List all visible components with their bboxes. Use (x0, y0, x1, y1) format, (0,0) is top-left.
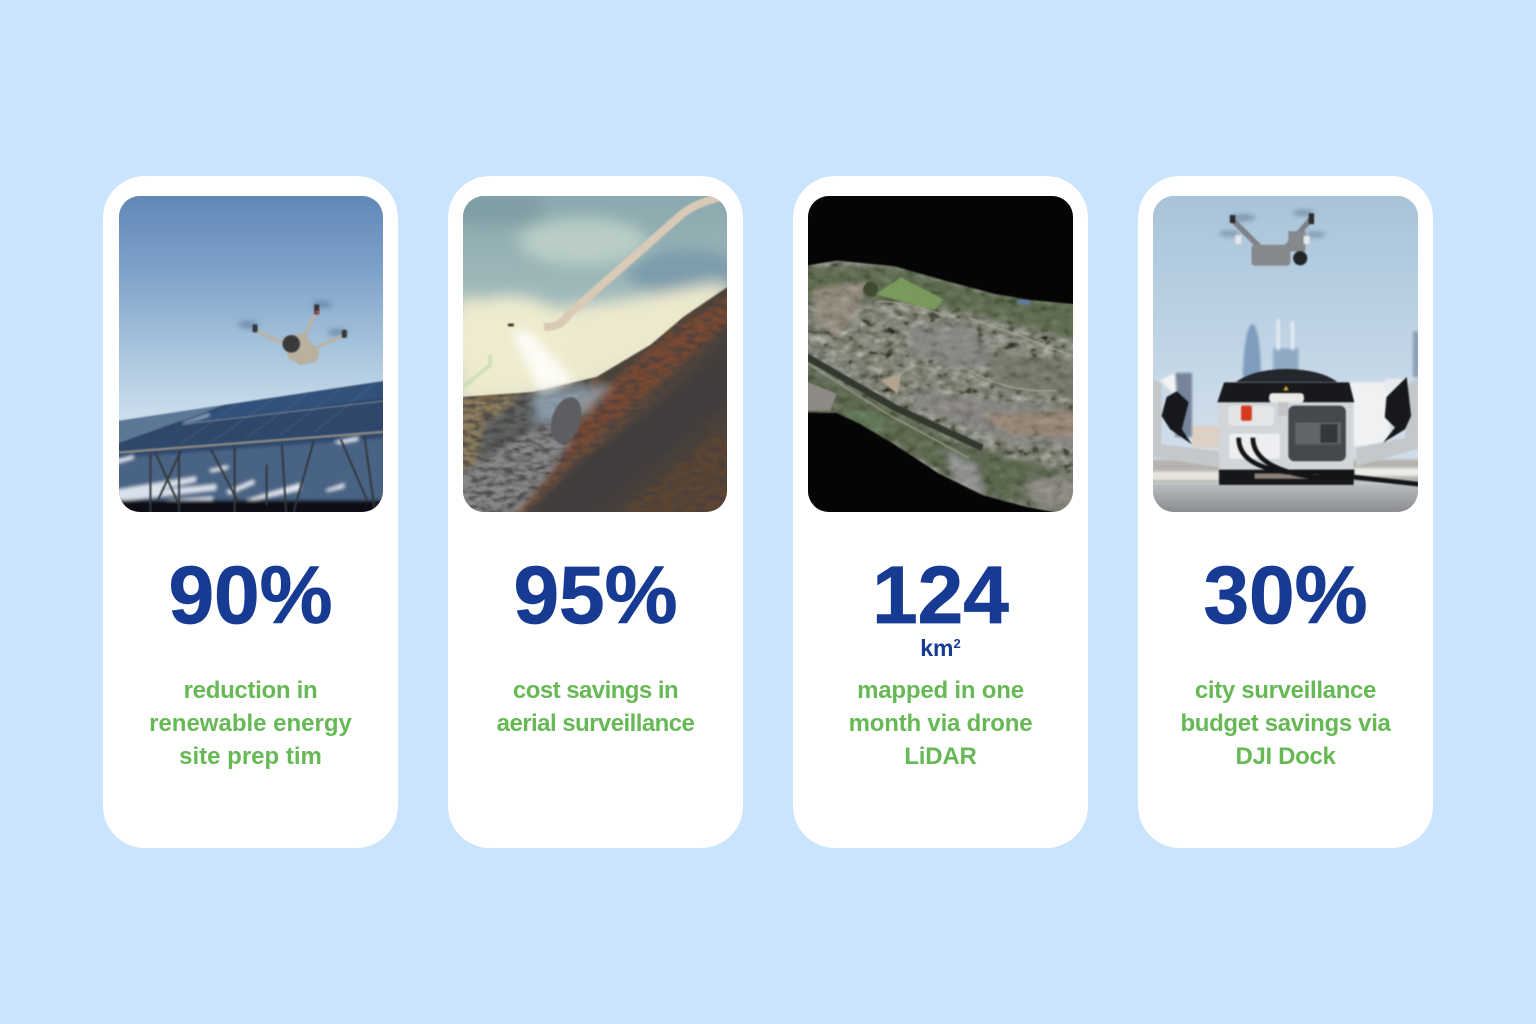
dock wings (1148, 377, 1219, 467)
stat: 95%: 95% (513, 550, 678, 641)
panel: city surveillance (1138, 176, 1433, 848)
description (497, 677, 694, 737)
description: mapped in one (857, 677, 1024, 704)
description: LiDAR (904, 743, 977, 770)
skyline (1148, 320, 1422, 483)
icon: drone (238, 302, 348, 365)
description: renewable energy (149, 710, 352, 737)
description: site prep tim (179, 743, 322, 770)
description (849, 677, 1032, 770)
image: drone over solar panels (119, 196, 383, 512)
description: cost savings in (513, 677, 678, 704)
description: aerial surveillance (497, 710, 694, 737)
description (149, 677, 352, 770)
flight path (544, 196, 723, 327)
dock body (1217, 369, 1419, 485)
icon: small drone (508, 324, 514, 326)
image: 3D terrain map on black (808, 196, 1073, 512)
panel: LiDAR mapping (793, 176, 1088, 848)
stat: 30%: 30% (1203, 550, 1368, 641)
image: drone scanning a hillside (463, 196, 727, 512)
description: city surveillance (1195, 677, 1376, 704)
icon: drone (1219, 210, 1326, 266)
panel: aerial surveillance (448, 176, 743, 848)
stat: 124: 124 (872, 550, 1009, 641)
terrain (458, 279, 732, 515)
description: month via drone (849, 710, 1032, 737)
stat: 90%: 90% (168, 550, 333, 641)
panel: renewable energy (103, 176, 398, 848)
image: drone above DJI Dock with skyline (1153, 196, 1418, 512)
description: budget savings via (1180, 710, 1391, 737)
unit: km squared: km2 (920, 635, 961, 661)
description: DJI Dock (1235, 743, 1336, 770)
description: reduction in (184, 677, 317, 704)
description (1180, 677, 1391, 770)
